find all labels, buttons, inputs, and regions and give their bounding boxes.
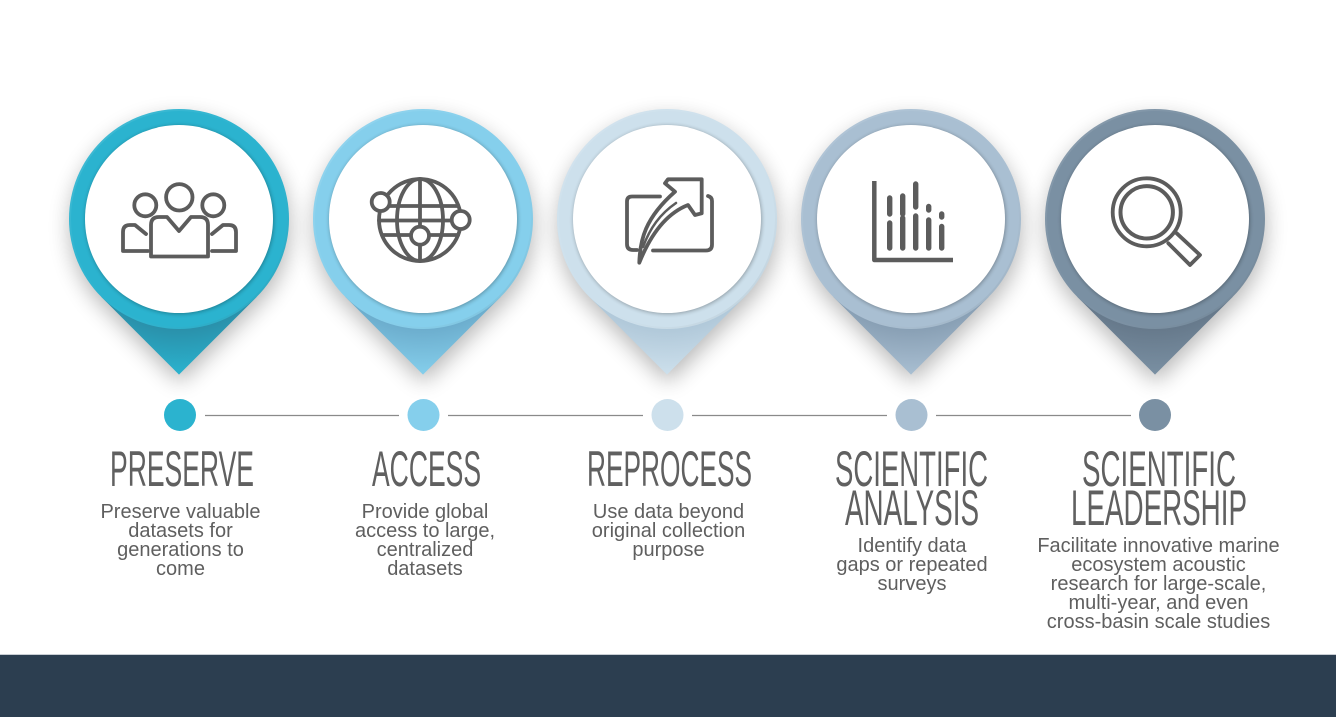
- icon: share arrow: [627, 179, 712, 263]
- heading: ANALYSIS: [845, 480, 979, 536]
- pin tip: [833, 297, 989, 375]
- footer band: [0, 654, 1336, 717]
- timeline dot 3: [652, 399, 684, 431]
- white disc: [573, 125, 762, 314]
- pin 4: scientific analysis: [801, 109, 1022, 383]
- icon: bar chart: [874, 181, 953, 260]
- pin shadow: [1046, 117, 1266, 383]
- heading: PRESERVE: [110, 441, 254, 497]
- description: generations to: [117, 539, 244, 561]
- text block: scientific leadership: [1037, 441, 1280, 633]
- description: original collection: [592, 520, 745, 542]
- description: purpose: [632, 539, 705, 561]
- pin 5: scientific leadership: [1045, 109, 1266, 383]
- heading: [835, 441, 988, 536]
- heading: REPROCESS: [587, 441, 752, 497]
- text block: access: [355, 441, 495, 580]
- pin tip: [345, 297, 501, 375]
- description: Preserve valuable: [100, 501, 261, 523]
- heading: [1071, 441, 1247, 536]
- text block: reprocess: [587, 441, 752, 561]
- heading: SCIENTIFIC: [835, 441, 988, 497]
- white disc: [817, 125, 1006, 314]
- pin shadow: [802, 117, 1022, 383]
- white disc: [1061, 125, 1250, 314]
- description: Use data beyond: [593, 501, 744, 523]
- description: datasets for: [128, 520, 233, 542]
- description: [100, 501, 261, 580]
- heading: ACCESS: [372, 441, 481, 497]
- timeline dot 4: [896, 399, 928, 431]
- description: Facilitate innovative marine: [1037, 535, 1280, 557]
- pin 2: access: [313, 109, 534, 383]
- pin ring: [557, 109, 777, 329]
- pin 3: reprocess: [557, 109, 778, 383]
- description: access to large,: [355, 520, 495, 542]
- icon: magnifier: [1113, 178, 1200, 265]
- description: multi-year, and even: [1068, 592, 1249, 614]
- pin 1: preserve: [69, 109, 290, 383]
- description: Identify data: [858, 535, 967, 557]
- pin tip: [101, 297, 257, 375]
- pin shadow: [314, 117, 534, 383]
- timeline dot 5: [1139, 399, 1171, 431]
- description: surveys: [878, 573, 946, 595]
- white disc: [85, 125, 274, 314]
- text block: scientific analysis: [835, 441, 988, 595]
- description: centralized: [377, 539, 473, 561]
- pin ring: [69, 109, 289, 329]
- description: ecosystem acoustic: [1071, 554, 1246, 576]
- pin tip: [589, 297, 745, 375]
- pin ring: [801, 109, 1021, 329]
- description: [836, 535, 988, 595]
- icon: globe: [372, 179, 470, 261]
- description: [355, 501, 495, 580]
- pin ring: [1045, 109, 1265, 329]
- timeline: [164, 399, 1171, 431]
- pin shadow: [70, 117, 290, 383]
- description: cross-basin scale studies: [1047, 611, 1270, 633]
- white disc: [329, 125, 518, 314]
- description: Provide global: [362, 501, 488, 523]
- description: gaps or repeated: [836, 554, 988, 576]
- description: [1037, 535, 1280, 633]
- pin tip: [1077, 297, 1233, 375]
- pin ring: [313, 109, 533, 329]
- timeline dot 1: [164, 399, 196, 431]
- text block: preserve: [100, 441, 261, 580]
- pin shadow: [558, 117, 778, 383]
- description: research for large-scale,: [1051, 573, 1266, 595]
- description: come: [156, 558, 205, 580]
- icon: people: [123, 184, 236, 256]
- description: datasets: [387, 558, 463, 580]
- timeline dot 2: [408, 399, 440, 431]
- description: [592, 501, 745, 561]
